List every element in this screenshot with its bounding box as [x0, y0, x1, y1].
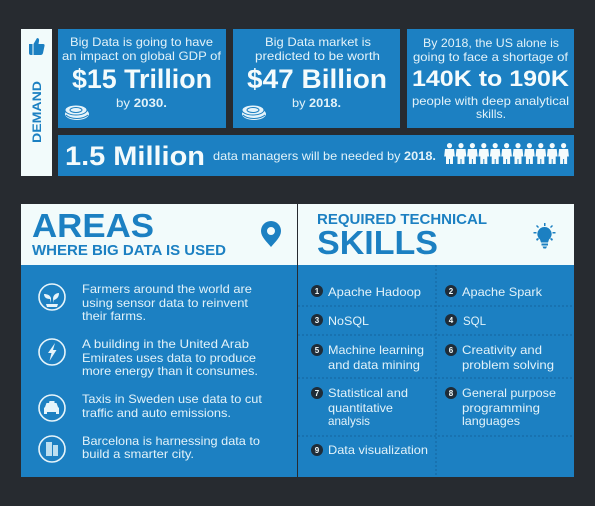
item: taxis in Sweden: Taxis in Sweden use data to cut — [82, 392, 263, 406]
card: 47 billion — [233, 29, 400, 128]
areas header: WHERE BIG DATA IS USED — [32, 242, 226, 259]
item: farmers: their farms. — [82, 309, 146, 323]
panel: required technical skills — [298, 204, 574, 477]
skill 2: Apache Spark — [462, 285, 543, 299]
icon: map pin — [261, 221, 281, 247]
icon: coins — [242, 105, 266, 120]
skill 7: quantitative — [328, 401, 393, 415]
card: 15 trillion — [58, 29, 226, 128]
skill 3: NoSQL — [328, 314, 369, 328]
card: 47 billion: $47 Billion — [247, 64, 387, 94]
skill 6 — [445, 343, 554, 372]
skill 8: 8 — [449, 389, 454, 398]
panel: areas where big data is used — [21, 204, 297, 477]
icon: row of people — [444, 143, 569, 164]
skill 4: 4 — [449, 316, 454, 325]
skill 9: Data visualization — [328, 443, 428, 457]
skill 5: 5 — [315, 346, 320, 355]
icon: city buildings — [39, 436, 65, 462]
card: 47 billion: by 2018. — [292, 96, 341, 110]
card: 140K to 190K: skills. — [476, 107, 506, 121]
skill 8: programming — [462, 401, 540, 415]
card: 140K to 190K: By 2018, the US alone is — [423, 36, 559, 50]
skill 3 — [311, 314, 369, 328]
panel: demand — [21, 29, 574, 176]
card: 15 trillion: by 2030. — [116, 96, 167, 110]
icon: light bulb — [534, 223, 556, 248]
card: 140K to 190K — [407, 29, 574, 128]
card: 1.5 million: 1.5 Million — [65, 141, 205, 171]
skill 7: 7 — [315, 389, 320, 398]
skills header: REQUIRED TECHNICAL — [317, 211, 487, 228]
item: Barcelona: build a smarter city. — [82, 447, 194, 461]
icon: lightning bolt — [39, 339, 65, 365]
card: 15 trillion: an impact on global GDP of — [62, 49, 222, 63]
demand label: DEMAND — [30, 81, 44, 143]
skill 9: 9 — [315, 446, 320, 455]
card: 47 billion: Big Data market is — [265, 35, 371, 49]
item: taxis in Sweden: traffic and auto emissions. — [82, 406, 231, 420]
areas header: AREAS — [32, 207, 154, 244]
skill 5 — [311, 343, 424, 372]
card: 140K to 190K: 140K to 190K — [412, 66, 569, 91]
skill 7: analysis — [328, 414, 370, 428]
item: Barcelona — [39, 434, 260, 462]
card: 47 billion: predicted to be worth — [255, 49, 380, 63]
item: farmers — [39, 282, 252, 323]
skill 5: and data mining — [328, 358, 420, 372]
skill 6: 6 — [449, 346, 454, 355]
item: farmers: using sensor data to reinvent — [82, 296, 249, 310]
skill 8: General purpose — [462, 386, 556, 400]
skill 4 — [445, 314, 486, 328]
skill 7 — [311, 386, 408, 428]
item: building in UAE: A building in the United Arab — [82, 337, 249, 351]
icon: plant — [39, 284, 65, 310]
skill 6: problem solving — [462, 358, 554, 372]
card: 140K to 190K: going to face a shortage of — [413, 50, 569, 64]
item: building in UAE: Emirates uses data to produce — [82, 351, 256, 365]
demand side tab — [21, 29, 52, 176]
item: Barcelona: Barcelona is harnessing data to — [82, 434, 260, 448]
skill 8: languages — [462, 414, 520, 428]
skill 4: SQL — [463, 314, 486, 328]
skill 1: 1 — [315, 287, 320, 296]
skill 3: 3 — [315, 316, 320, 325]
skill 8 — [445, 386, 556, 428]
item: farmers: Farmers around the world are — [82, 282, 252, 296]
skill 6: Creativity and — [462, 343, 542, 357]
item: building in UAE: more energy than it consumes. — [82, 364, 258, 378]
card: 15 trillion: $15 Trillion — [72, 64, 212, 94]
icon: thumbs up — [29, 38, 45, 55]
card: 1.5 million: data managers will be needed by 2018. — [213, 149, 436, 163]
icon: taxi — [39, 395, 65, 421]
card: 1.5 million — [58, 135, 574, 176]
skill 1: Apache Hadoop — [328, 285, 421, 299]
skill 2: 2 — [449, 287, 454, 296]
item: building in UAE — [39, 337, 258, 378]
skills header: SKILLS — [317, 224, 438, 261]
grid lines — [298, 265, 574, 477]
card: 140K to 190K: people with deep analytical — [412, 94, 569, 108]
skills header — [298, 204, 574, 265]
card: 15 trillion: Big Data is going to have — [70, 35, 213, 49]
icon: coins — [65, 105, 89, 120]
skill 7: Statistical and — [328, 386, 408, 400]
skill 5: Machine learning — [328, 343, 424, 357]
item: taxis in Sweden — [39, 392, 263, 421]
areas header — [21, 204, 297, 265]
